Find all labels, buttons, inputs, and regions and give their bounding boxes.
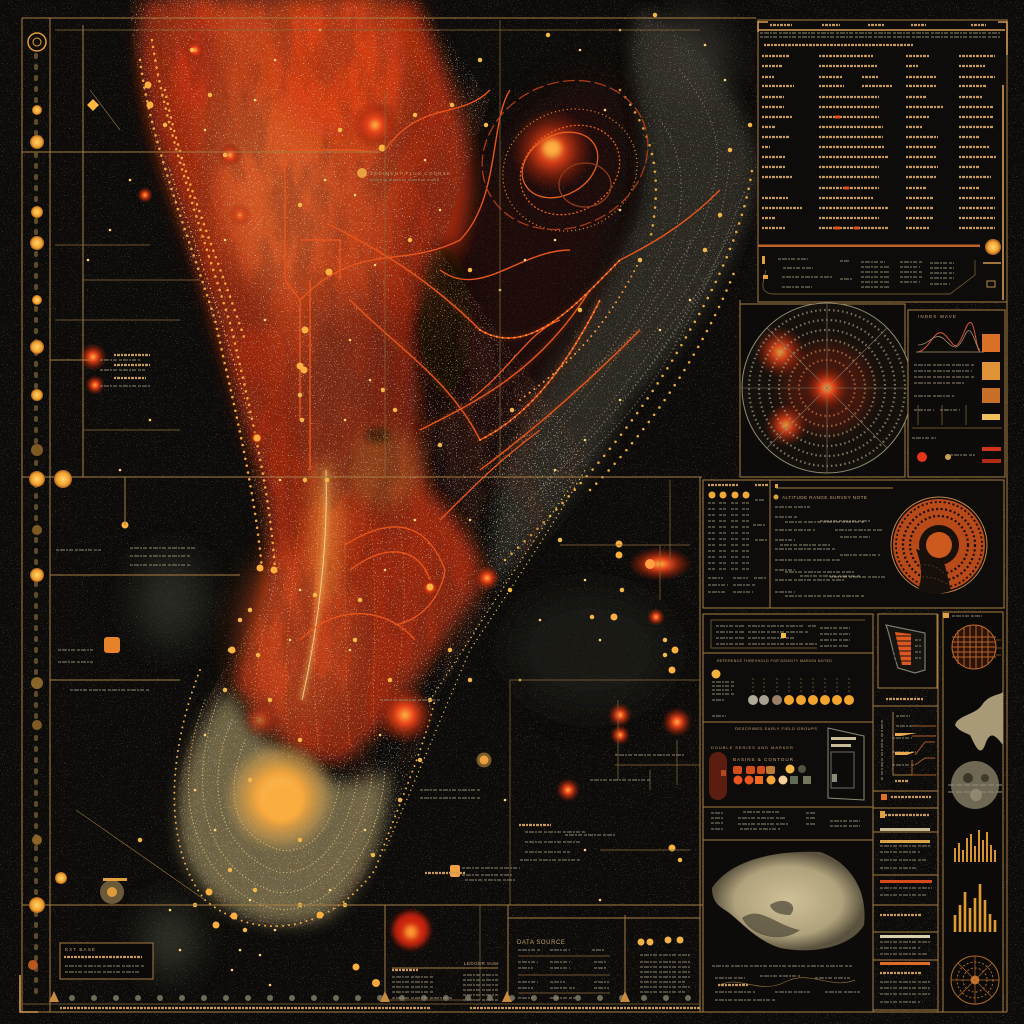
glowing red nodes: [79, 40, 692, 948]
polar chart panel: [740, 303, 912, 477]
row: coin scale: REFERENCE THRESHOLD FOR DENSITY MARGIN NOTED: [717, 659, 832, 663]
row: swatches and tablet: BASINS & CONTOUR: [733, 757, 794, 762]
icon: world map: [955, 692, 1003, 750]
plume: grey stipple band: [488, 10, 758, 588]
panel: radial disk and text: [703, 300, 1007, 1012]
spiral cluster: [458, 54, 672, 256]
map labels: [56, 171, 685, 880]
icon: grid sphere: [952, 625, 1002, 669]
bottom tables: DATA SOURCE: [517, 940, 565, 946]
row: swatches and tablet: DESCRIBED EARLY FIELD GROUPS: [735, 726, 817, 731]
icon: radial disk: [951, 956, 999, 1004]
plume: main red body: [120, 0, 620, 950]
orange vein network: [285, 90, 720, 640]
bottom centre red note: LEDGER SUM: [464, 961, 498, 966]
icon: tall bars: [955, 884, 995, 932]
panel stack: [703, 614, 873, 840]
bottom centre red note: [392, 961, 498, 1000]
row: swatches and tablet: [709, 726, 864, 800]
gold nodes: [88, 15, 750, 985]
far right image column: [943, 612, 1004, 1012]
right top panel: data table: [758, 20, 1007, 302]
row: notes: [711, 812, 860, 829]
bottom icon strip: [20, 975, 700, 1012]
side charts panel: INDEX WAVE: [918, 314, 956, 319]
legend box bottom left: EXT BASE: [65, 947, 95, 952]
row: coin scale: [712, 659, 854, 716]
plume: dotted flow contours: [140, 40, 585, 850]
row: swatches and tablet: DOUBLE SERIES AND MARKER: [711, 745, 793, 750]
legend box bottom left: [60, 943, 153, 979]
panel: radial disk and text: ALTITUDE RANGE SURVEY NOTE: [782, 495, 867, 500]
right middle column rows: [873, 614, 938, 1012]
globe panel: [703, 840, 873, 1012]
bottom tables: [508, 918, 700, 998]
icon: orange bars: [955, 830, 995, 862]
side charts panel: [908, 310, 1005, 477]
background speckle: [50, 15, 750, 1010]
mini bar chart: [878, 614, 937, 688]
left rail coins: [28, 33, 490, 1000]
plume: pale gold halo: [170, 660, 435, 940]
plume: dark red right zone: [420, 79, 627, 507]
map labels: SEDIMENT FLUX COURSE: [370, 171, 450, 176]
row: mini table: [711, 620, 865, 648]
icon: moon: [948, 761, 1004, 809]
